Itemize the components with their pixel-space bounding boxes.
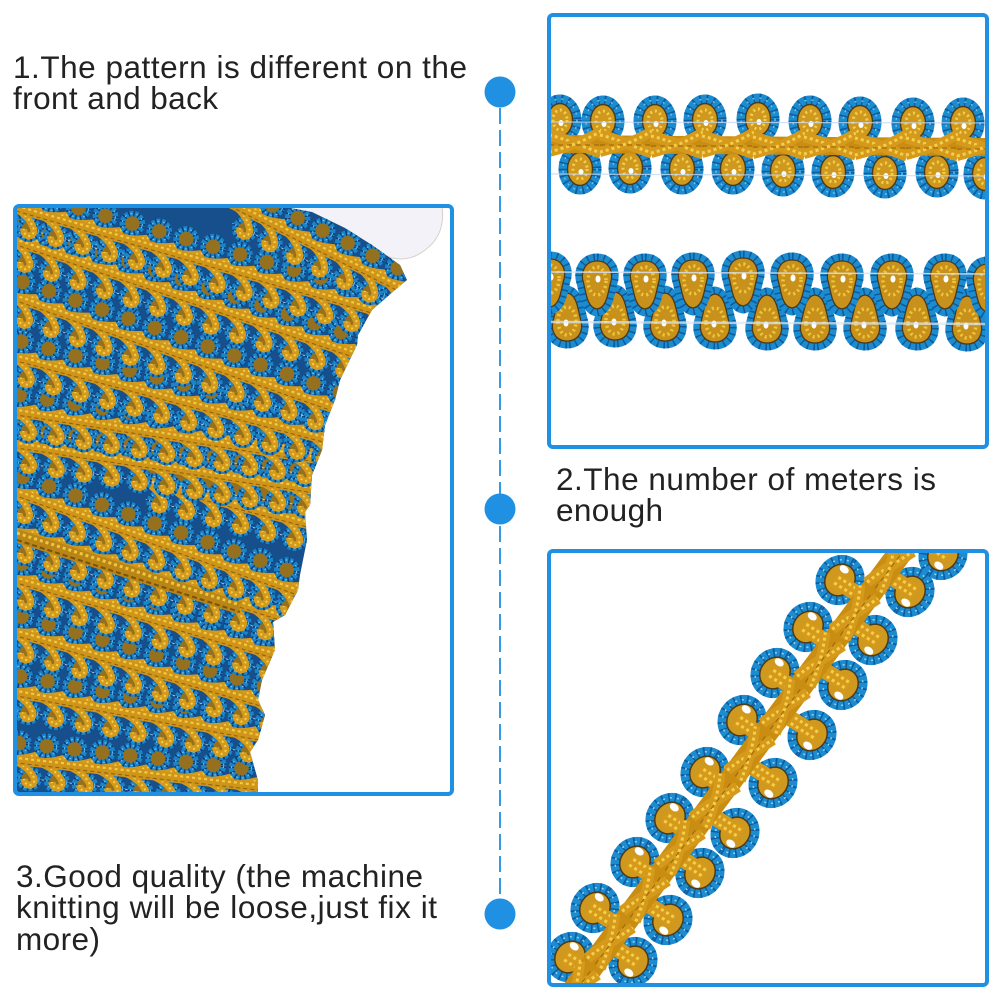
marker 1 — [484, 76, 516, 108]
heading: point 2 second line: enough — [556, 492, 663, 528]
panel: diagonal trim close-up — [547, 549, 989, 987]
marker 2 — [484, 494, 516, 524]
panel: front and back of trim — [532, 15, 1000, 447]
fabric rows — [17, 208, 407, 792]
back strip — [532, 254, 1000, 348]
card behind trim — [285, 206, 443, 259]
dashed line — [499, 108, 501, 902]
panel: rolled trim photo — [13, 204, 454, 796]
frame — [15, 206, 452, 794]
heading: point 2: 2.The number of meters is — [556, 461, 936, 497]
heading: point 3: 3.Good quality (the machine — [16, 858, 423, 894]
timeline connector — [484, 76, 516, 930]
diagonal braid — [551, 553, 968, 983]
heading: point 3 second line: knitting will be loose,just fix it — [16, 889, 437, 925]
heading: point 1 second line: front and back — [13, 80, 218, 116]
frame — [549, 551, 987, 985]
marker 3 — [484, 898, 516, 930]
heading: point 3 third line: more) — [16, 921, 100, 957]
frame — [549, 15, 987, 447]
front strip — [543, 98, 1000, 195]
heading: point 1: 1.The pattern is different on the — [13, 49, 467, 85]
